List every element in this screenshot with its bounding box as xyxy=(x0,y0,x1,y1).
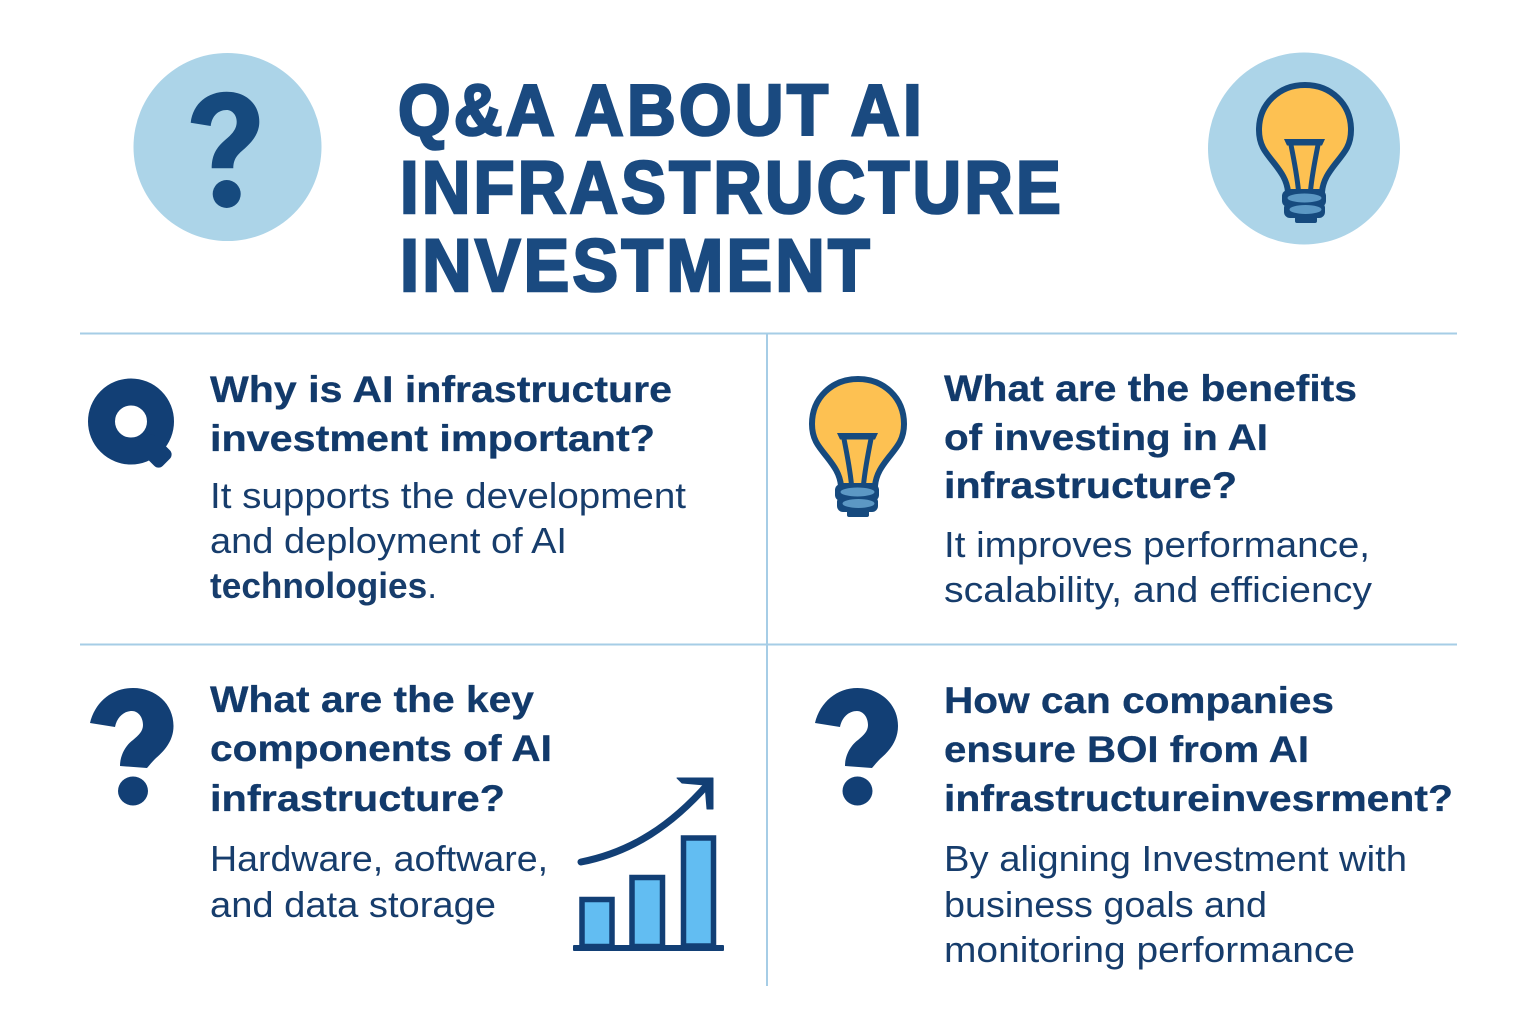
heading: ensure ROI: infrastructureinvesrment? xyxy=(944,778,1453,819)
answer: benefits: scalability, and efficiency xyxy=(944,569,1372,610)
icon: question mark in circle xyxy=(134,53,322,241)
answer: why important: It supports the development xyxy=(210,475,686,516)
answer: benefits: It improves performance, xyxy=(944,524,1370,565)
grid dividers xyxy=(80,332,1457,986)
panel: key components xyxy=(90,679,724,951)
heading: why important: investment important? xyxy=(210,418,655,459)
heading: ensure ROI xyxy=(944,680,1453,819)
heading: benefits: infrastructure? xyxy=(944,465,1237,506)
icon: question mark xyxy=(90,688,174,806)
heading: key components: What are the key xyxy=(210,679,534,720)
chart: rising bars with arrow xyxy=(573,778,724,951)
answer: ensure ROI: monitoring performance xyxy=(944,929,1355,970)
answer: key components: and data storage xyxy=(210,884,496,925)
answer: key components: Hardware, aoftware, xyxy=(210,838,548,879)
answer: ensure ROI xyxy=(944,838,1407,970)
title: INFRASTRUCTURE xyxy=(400,146,1064,229)
icon: question mark xyxy=(815,688,898,806)
heading: ensure ROI: How can companies xyxy=(944,680,1334,721)
heading: benefits: What are the benefits xyxy=(944,368,1357,409)
answer: why important: and deployment of AI xyxy=(210,520,567,561)
heading: why important: Why is AI infrastructure xyxy=(210,369,672,410)
heading: benefits: of investing in AI xyxy=(944,417,1268,458)
heading: key components: infrastructure? xyxy=(210,778,505,819)
panel: ensure ROI xyxy=(815,680,1453,970)
title: INVESTMENT xyxy=(400,224,873,307)
answer: ensure ROI: By aligning Investment with xyxy=(944,838,1407,879)
panel: benefits of investing xyxy=(812,368,1372,610)
heading: benefits xyxy=(944,368,1357,506)
answer: benefits xyxy=(944,524,1372,610)
heading: key components xyxy=(210,679,552,819)
heading: ensure ROI: ensure BOI from AI xyxy=(944,729,1309,770)
icon: letter Q xyxy=(102,392,174,470)
title: Q&A ABOUT AI xyxy=(398,71,925,151)
answer: ensure ROI: business goals and xyxy=(944,884,1267,925)
answer: why important xyxy=(210,475,686,606)
answer: why important: technologies. xyxy=(210,565,437,606)
title xyxy=(398,71,1064,307)
panel: why is AI infrastructure investment important xyxy=(102,369,686,606)
heading: why important xyxy=(210,369,672,459)
icon: light bulb xyxy=(812,379,904,517)
icon: light bulb in circle xyxy=(1208,52,1400,244)
heading: key components: components of AI xyxy=(210,728,552,769)
answer: key components xyxy=(210,838,548,925)
